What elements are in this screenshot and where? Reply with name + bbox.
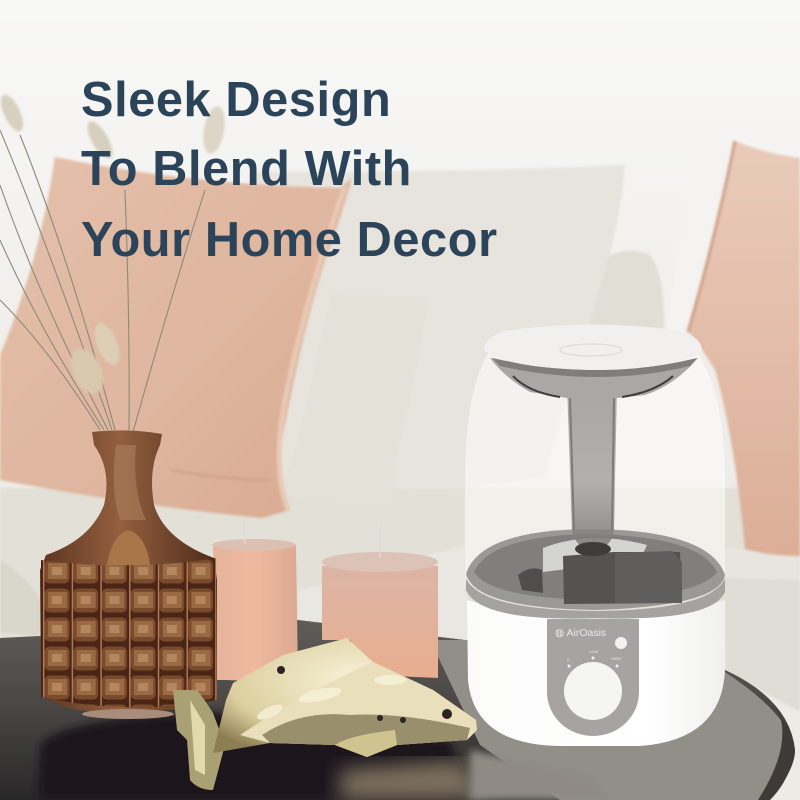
vase ribbed tiles	[41, 558, 217, 707]
logo: ◍ AirOasis	[555, 627, 606, 639]
control panel	[547, 619, 639, 736]
table top	[0, 620, 795, 800]
dial	[564, 662, 622, 720]
top lid	[484, 324, 702, 370]
brown vase	[40, 430, 217, 719]
white base	[467, 600, 725, 746]
dark funnel under lid	[490, 358, 698, 398]
heading line 3: Your Home Decor	[81, 213, 498, 267]
right pink cushion	[688, 141, 800, 556]
nebulizer base	[543, 538, 647, 572]
humidifier	[465, 324, 725, 746]
heading line 2: To Blend With	[81, 142, 412, 196]
small spout	[518, 568, 543, 593]
dried grass stems	[0, 91, 228, 432]
water tray	[466, 529, 725, 610]
large pink cushion	[0, 157, 352, 518]
sofa back and cushions	[0, 142, 800, 712]
heading line 1: Sleek Design	[81, 73, 391, 127]
clear tank	[465, 350, 725, 585]
grass tufts	[0, 91, 228, 399]
mode dots	[568, 656, 618, 668]
motor block	[563, 552, 682, 604]
control panel: LOW	[589, 649, 598, 654]
power button	[615, 637, 627, 649]
candle right	[322, 524, 438, 678]
tray rim	[466, 578, 725, 618]
control panel: HIGH	[611, 656, 621, 661]
small white cushion	[281, 294, 428, 504]
candle left	[212, 517, 298, 681]
control panel: O	[567, 657, 570, 662]
central column	[567, 385, 617, 550]
gold fish ornament	[173, 638, 477, 790]
